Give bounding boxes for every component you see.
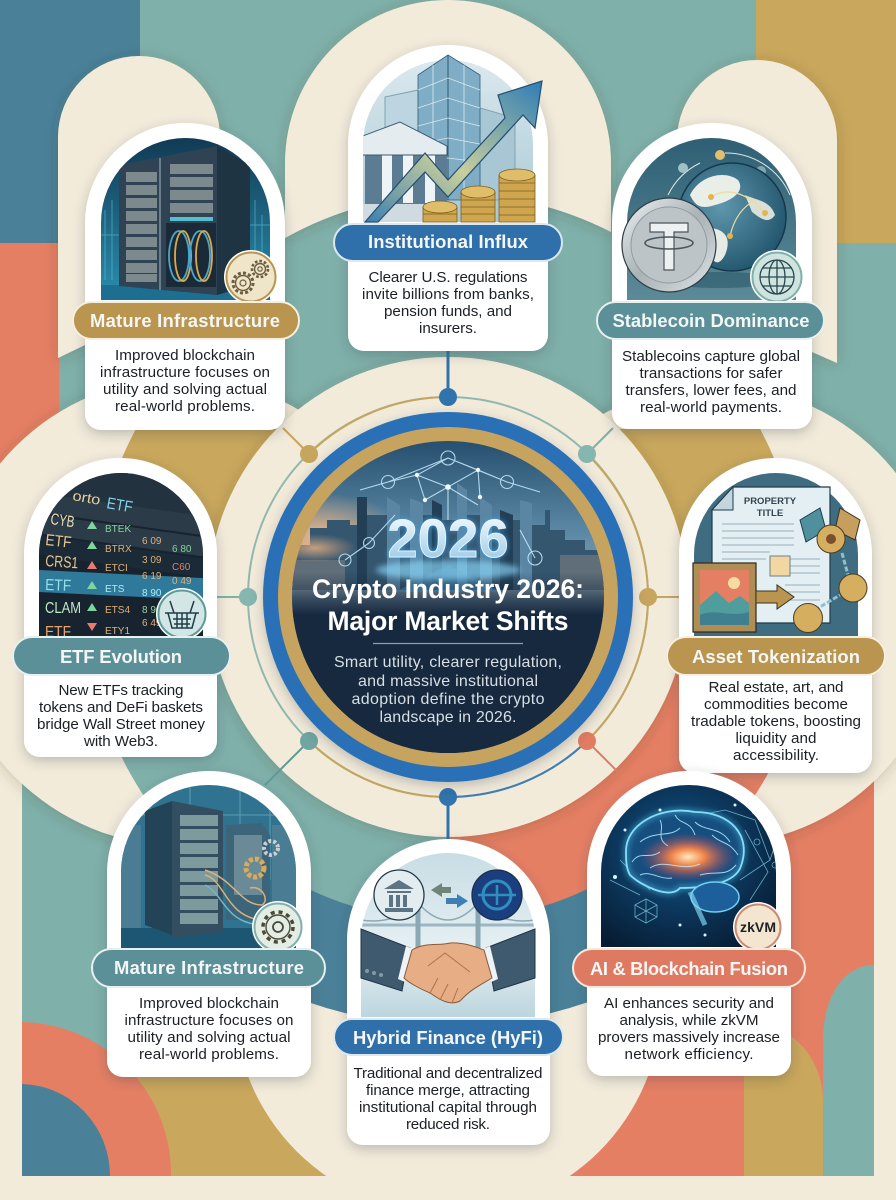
lower-left quarter circles (22, 1022, 171, 1176)
body text (37, 682, 205, 750)
image: ETF ticker board: 6 80 (172, 544, 192, 555)
icon: gears (224, 250, 278, 304)
centre description (334, 654, 562, 726)
pill heading: ETF Evolution (60, 646, 182, 667)
pill heading (597, 302, 824, 339)
card: Mature Infrastructure (bottom left) (92, 771, 325, 1077)
body text: finance merge, attracting (366, 1082, 530, 1099)
pill heading (13, 637, 230, 675)
image: property title, painting and tokens: PROPERTY (744, 496, 797, 507)
body text (354, 1065, 542, 1133)
body text (691, 679, 861, 764)
image: ETF ticker board: ETF (105, 495, 134, 516)
body text: provers massively increase (598, 1029, 780, 1046)
image: bank, skyscrapers, arrow and coins (355, 55, 542, 222)
icon: gear badge (252, 901, 304, 953)
image: ETF ticker board (39, 473, 203, 636)
body text: Improved blockchain (139, 995, 279, 1012)
body text: infrastructure focuses on (124, 1012, 294, 1029)
pill heading: Asset Tokenization (692, 646, 860, 667)
body text: invite billions from banks, (362, 286, 534, 303)
card: Hybrid Finance (HyFi) (334, 839, 563, 1145)
body text: Clearer U.S. regulations (368, 269, 528, 286)
image: ETF ticker board: BTEK (105, 524, 131, 535)
pill heading: Mature Infrastructure (114, 957, 304, 978)
image: ETF ticker board: 8 90 (142, 605, 162, 616)
body text: real-world problems. (139, 1046, 279, 1063)
image: data centre racks and cables (121, 785, 296, 948)
bottom centre cream arch (248, 1002, 648, 1176)
image: ETF ticker board: ETY1 (105, 626, 130, 637)
body text: AI enhances security and (604, 995, 774, 1012)
image: ETF ticker board: 0 49 (172, 576, 192, 587)
image: ETF ticker board: ETS4 (105, 605, 130, 616)
body text: New ETFs tracking (58, 682, 184, 699)
top cream arches (58, 0, 837, 363)
body text: Stablecoins capture global (622, 348, 800, 365)
image: ETF ticker board: orto (71, 487, 102, 508)
image: handshake on a bridge (361, 853, 535, 1017)
body text: Real estate, art, and (708, 679, 844, 696)
centre title: Crypto Industry 2026: (312, 574, 584, 604)
centre title: Major Market Shifts (328, 606, 568, 636)
card: Asset Tokenization (667, 458, 885, 773)
pill heading (334, 1019, 563, 1055)
body text (100, 347, 270, 415)
body text: tokens and DeFi baskets (39, 699, 203, 716)
image: ETF ticker board: 6 09 (142, 536, 162, 547)
card: AI & Blockchain Fusion (573, 771, 805, 1076)
centre title (312, 574, 584, 636)
body text (598, 995, 780, 1063)
centre description: Smart utility, clearer regulation, (334, 654, 562, 671)
body text: infrastructure focuses on (100, 364, 270, 381)
body text: network efficiency. (624, 1046, 754, 1063)
body text: transactions for safer (640, 365, 782, 382)
body text: real-world problems. (115, 398, 255, 415)
body text: analysis, while zkVM (620, 1012, 758, 1029)
image: ETF ticker board: ETS (105, 584, 125, 595)
body text (622, 348, 800, 416)
body text: tradable tokens, boosting (691, 713, 861, 730)
centre description: adoption define the crypto (352, 691, 545, 708)
year 2026: 2026 (388, 509, 508, 569)
side cream blobs (0, 378, 896, 846)
pill heading: AI & Blockchain Fusion (590, 958, 788, 979)
body text (362, 269, 534, 337)
pill heading: Hybrid Finance (HyFi) (353, 1027, 543, 1048)
icon: basket badge (156, 588, 208, 640)
image: ETF ticker board: CLAM (45, 600, 81, 617)
image: server rack (101, 138, 270, 300)
image: ETF ticker board: ETF (45, 624, 71, 641)
image: ETF ticker board: CRS1 (45, 553, 79, 572)
body text (124, 995, 294, 1063)
image: ETF ticker board: ETF (45, 577, 72, 595)
card: Mature Infrastructure (top left) (73, 123, 299, 430)
image: ETF ticker board: 8 90 (142, 588, 162, 599)
body text: real-world payments. (640, 399, 782, 416)
body text: accessibility. (733, 747, 819, 764)
pill heading: Stablecoin Dominance (612, 310, 810, 331)
image: ETF ticker board: CYB (49, 511, 76, 531)
image: ETF ticker board: ETCI (105, 563, 128, 574)
body text: utility and solving actual (103, 381, 267, 398)
image: ETF ticker board: 6 49 (142, 618, 162, 629)
body text: Improved blockchain (115, 347, 255, 364)
icon: globe badge (750, 250, 804, 304)
blue lower ring (311, 889, 587, 1014)
body text: with Web3. (83, 733, 158, 750)
body text: reduced risk. (406, 1116, 490, 1133)
lower-right arches (744, 965, 874, 1176)
pill heading (92, 949, 325, 987)
card: Stablecoin Dominance (597, 123, 824, 429)
body text: commodities become (704, 696, 848, 713)
card: ETF Evolution (13, 458, 236, 757)
centre description: landscape in 2026. (380, 709, 516, 726)
image: globe and stablecoin (622, 138, 796, 300)
image: glowing brain (601, 785, 778, 947)
connector ring and nodes (217, 351, 680, 839)
body text: liquidity and (736, 730, 816, 747)
centre cream ring (208, 357, 688, 837)
icon: zkVM badge (733, 902, 783, 952)
pill heading (667, 637, 885, 675)
centre description: and massive institutional (358, 673, 538, 690)
pill heading: Mature Infrastructure (90, 310, 280, 331)
image: ETF ticker board: 3 09 (142, 555, 162, 566)
body text: insurers. (419, 320, 477, 337)
body text: bridge Wall Street money (37, 716, 205, 733)
central medallion (235, 412, 633, 782)
pill heading (334, 224, 562, 261)
card: Institutional Influx (334, 45, 562, 351)
body text: transfers, lower fees, and (626, 382, 796, 399)
body text: Traditional and decentralized (354, 1065, 542, 1082)
pill heading (73, 302, 299, 339)
icon: zkVM badge: zkVM (740, 919, 776, 935)
body text: pension funds, and (384, 303, 512, 320)
image: property title, painting and tokens (693, 473, 867, 637)
body text: institutional capital through (359, 1099, 537, 1116)
skyline image (292, 441, 604, 753)
image: ETF ticker board: C60 (172, 562, 191, 573)
image: property title, painting and tokens: TITLE (757, 508, 783, 519)
pill heading (573, 949, 805, 987)
large backing disc (82, 230, 814, 962)
body text: utility and solving actual (128, 1029, 290, 1046)
image: ETF ticker board: ETF (45, 532, 72, 552)
image: ETF ticker board: 6 19 (142, 571, 162, 582)
pill heading: Institutional Influx (368, 231, 529, 252)
image: ETF ticker board: BTRX (105, 544, 132, 555)
